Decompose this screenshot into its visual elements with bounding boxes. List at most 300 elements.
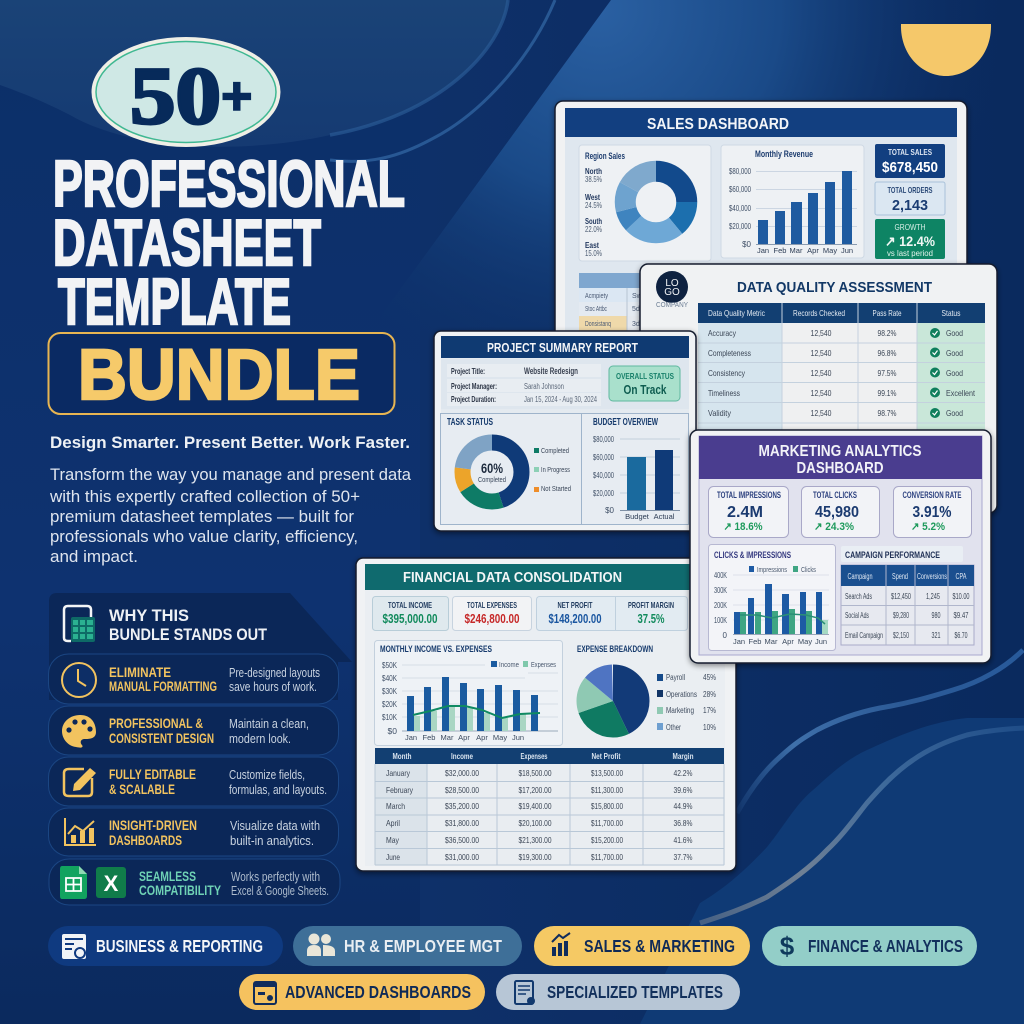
row: fully editable and scalable: FULLY EDITABLE xyxy=(109,766,196,782)
table: campaign performance: $12,450 xyxy=(891,592,911,601)
pill: hr and employee mgt xyxy=(293,926,522,966)
row: eliminate manual formatting: ELIMINATE xyxy=(109,664,171,680)
table: data quality: Good xyxy=(946,328,963,338)
card: project summary report xyxy=(434,331,696,531)
table: monthly financials: $31,800.00 xyxy=(445,818,479,828)
icon: google sheets xyxy=(60,866,87,899)
pill: finance and analytics xyxy=(762,926,977,966)
stat: total orders: TOTAL ORDERS xyxy=(888,185,933,195)
table: campaign performance: 321 xyxy=(932,631,941,640)
chart: monthly income vs expenses: $30K xyxy=(382,686,397,696)
table: data quality: Good xyxy=(946,368,963,378)
table: campaign performance: Campaign xyxy=(848,572,872,581)
pill: business and reporting xyxy=(48,926,283,966)
row: eliminate manual formatting: MANUAL FORMATTING xyxy=(109,678,217,694)
icon: people xyxy=(307,934,335,956)
project info: Project Manager: xyxy=(451,381,497,391)
table: data quality: 98.2% xyxy=(878,328,897,338)
chart: clicks and impressions xyxy=(708,544,836,650)
table: data quality: 12,540 xyxy=(810,388,832,398)
table: data quality: Status xyxy=(942,308,960,318)
stat: conversion rate: 3.91% xyxy=(912,504,952,521)
pill: advanced dashboards xyxy=(239,974,485,1010)
panel: task status xyxy=(440,414,582,524)
row: fully editable and scalable: formulas, and layouts. xyxy=(229,782,327,797)
description paragraph xyxy=(49,465,412,566)
description paragraph: and impact. xyxy=(50,547,138,566)
panel: budget overview xyxy=(582,414,688,524)
table: campaign performance xyxy=(841,565,974,645)
icon: clock xyxy=(62,663,96,697)
table: monthly financials: Income xyxy=(451,752,473,761)
table: monthly financials: April xyxy=(386,818,400,828)
project info: Website Redesign xyxy=(524,366,578,376)
table: data quality: 99.1% xyxy=(878,388,897,398)
table: campaign performance: $6.70 xyxy=(954,631,968,640)
bundle banner: BUNDLE xyxy=(78,336,360,415)
row: insight-driven dashboards: built-in analytics. xyxy=(230,833,314,848)
chart: clicks and impressions: Clicks xyxy=(801,565,816,574)
chart: monthly income vs expenses: Jan xyxy=(405,733,417,742)
table: monthly financials: 39.6% xyxy=(674,785,693,795)
table: data quality: 12,540 xyxy=(810,368,832,378)
stat: total sales: TOTAL SALES xyxy=(888,147,932,157)
chart: clicks and impressions: 300K xyxy=(714,586,727,595)
row: seamless compatibility xyxy=(49,859,340,905)
table: data quality: 97.5% xyxy=(878,368,897,378)
panel: region sales: South xyxy=(585,216,602,226)
row: insight-driven dashboards: Visualize data with xyxy=(230,818,320,833)
row: seamless compatibility: Excel & Google Sheets. xyxy=(231,883,329,898)
chart: expense breakdown: 45% xyxy=(703,673,716,682)
table: monthly financials: $36,500.00 xyxy=(445,835,479,845)
table: campaign performance: $2,150 xyxy=(893,631,909,640)
description paragraph: Transform the way you manage and present data xyxy=(50,465,412,484)
stat: total expenses xyxy=(452,596,532,630)
pill: specialized templates: SPECIALIZED TEMPLATES xyxy=(547,982,723,1002)
table: sales lower xyxy=(579,273,649,336)
panel: budget overview: $80,000 xyxy=(593,435,614,444)
table: monthly financials: Net Profit xyxy=(592,752,621,761)
panel: region sales: 22.0% xyxy=(585,225,602,234)
chart: clicks and impressions: CLICKS & IMPRESSIONS xyxy=(714,550,791,560)
table: monthly financials: $15,800.00 xyxy=(591,801,623,811)
panel: region sales: East xyxy=(585,240,599,250)
table: monthly financials: May xyxy=(386,835,400,845)
table: data quality: Timeliness xyxy=(708,388,740,398)
table: data quality: Data Quality Metric xyxy=(708,308,766,318)
stat: total clicks: ↗ 24.3% xyxy=(814,521,854,533)
stat: total clicks: 45,980 xyxy=(815,504,859,521)
panel: region sales: 15.0% xyxy=(585,249,602,258)
card: marketing analytics dashboard xyxy=(690,430,991,663)
table: campaign performance: $10.00 xyxy=(952,592,970,601)
table: data quality: 12,540 xyxy=(810,348,832,358)
table: campaign performance: Search Ads xyxy=(845,592,872,601)
icon: chart xyxy=(65,818,96,845)
chart: expense breakdown: Other xyxy=(666,723,681,732)
row: seamless compatibility: COMPATIBILITY xyxy=(139,882,222,898)
pill: finance and analytics: FINANCE & ANALYTICS xyxy=(808,936,963,956)
table: data quality: Good xyxy=(946,348,963,358)
chart: expense breakdown: 17% xyxy=(703,706,716,715)
table: data quality: Completeness xyxy=(708,348,751,358)
table: campaign performance: $9.47 xyxy=(954,611,969,620)
chart: monthly income vs expenses: $50K xyxy=(382,660,397,670)
panel: monthly revenue: $60,000 xyxy=(729,185,751,194)
badge: 50+ xyxy=(92,37,280,147)
chart: expense breakdown: 10% xyxy=(703,723,716,732)
row: fully editable and scalable: & SCALABLE xyxy=(109,781,175,797)
stat: total sales: $678,450 xyxy=(882,159,938,176)
panel: monthly revenue xyxy=(721,145,864,258)
table: campaign performance: Email Campaign xyxy=(845,631,883,640)
table: data quality: 98.7% xyxy=(878,408,897,418)
panel: monthly revenue: Apr xyxy=(807,246,819,255)
table: monthly financials: $11,300.00 xyxy=(591,785,623,795)
chart: monthly income vs expenses: Feb xyxy=(423,733,435,742)
stat: total sales xyxy=(875,144,945,178)
chart: clicks and impressions: Jan xyxy=(733,637,745,646)
project info: Project Title: xyxy=(451,366,485,376)
table: data quality: Validity xyxy=(708,408,732,418)
logo: LO xyxy=(665,278,679,289)
title: PROFESSIONAL xyxy=(53,147,405,220)
stat: total income xyxy=(372,596,448,630)
table: monthly financials: June xyxy=(386,852,400,862)
panel: budget overview: Budget xyxy=(625,512,650,521)
chart: expense breakdown: EXPENSE BREAKDOWN xyxy=(577,644,653,655)
chart: clicks and impressions: Feb xyxy=(749,637,761,646)
chart: monthly income vs expenses: $20K xyxy=(382,699,397,709)
panel: why this bundle stands out xyxy=(49,593,352,700)
table: sales lower: Stoc Attbc xyxy=(585,306,607,313)
heading: campaign performance: CAMPAIGN PERFORMANCE xyxy=(845,550,940,561)
status: on track: On Track xyxy=(624,382,667,397)
stat: total expenses: TOTAL EXPENSES xyxy=(467,600,517,610)
panel: task status: 60% xyxy=(481,460,503,476)
table: sales lower: 3d xyxy=(632,321,640,328)
icon: dashboard window xyxy=(254,982,276,1004)
table: monthly financials: 41.6% xyxy=(674,835,693,845)
table: monthly financials: February xyxy=(386,785,414,795)
row: seamless compatibility: SEAMLESS xyxy=(139,868,196,884)
pill: hr and employee mgt: HR & EMPLOYEE MGT xyxy=(344,936,502,956)
donut chart: task status xyxy=(462,442,522,502)
chart: clicks and impressions: May xyxy=(798,637,812,646)
row: fully editable and scalable xyxy=(48,757,338,806)
chart: monthly income vs expenses: MONTHLY INCOME VS. EXPENSES xyxy=(380,644,492,655)
chart: monthly income vs expenses: $0 xyxy=(388,726,397,736)
row: seamless compatibility: Works perfectly with xyxy=(231,869,320,884)
table: monthly financials: 44.9% xyxy=(674,801,693,811)
panel: task status: TASK STATUS xyxy=(447,417,493,428)
stat: growth: GROWTH xyxy=(894,222,926,232)
stat: net profit and margin: 37.5% xyxy=(638,611,665,626)
table: monthly financials: Margin xyxy=(672,752,694,761)
table: data quality xyxy=(698,303,985,430)
icon: spreadsheet xyxy=(64,606,95,642)
chart: monthly income vs expenses: $40K xyxy=(382,673,397,683)
table: data quality: Consistency xyxy=(708,368,746,378)
table: campaign performance: Social Ads xyxy=(845,611,869,620)
heading: data quality assessment: DATA QUALITY ASSESSMENT xyxy=(737,279,932,296)
chart: monthly income vs expenses: Income xyxy=(499,660,519,669)
table: data quality: Good xyxy=(946,408,963,418)
table: campaign performance: Spend xyxy=(892,572,908,581)
chart: monthly income vs expenses: $10K xyxy=(382,712,397,722)
project info: Project Duration: xyxy=(451,394,496,404)
chart: clicks and impressions: 0 xyxy=(723,631,728,640)
row: professional and consistent design: PROFESSIONAL & xyxy=(109,715,203,731)
panel: region sales: 38.5% xyxy=(585,175,602,184)
table: monthly financials: $28,500.00 xyxy=(445,785,479,795)
table: monthly financials: 36.8% xyxy=(674,818,693,828)
header: project summary xyxy=(441,336,689,358)
chart: clicks and impressions: 200K xyxy=(714,601,727,610)
table: monthly financials: $13,500.00 xyxy=(591,768,623,778)
project info: Jan 15, 2024 - Aug 30, 2024 xyxy=(524,395,597,404)
table: campaign performance: 980 xyxy=(932,611,941,620)
card: sales dashboard xyxy=(555,101,967,351)
table: campaign performance: CPA xyxy=(956,572,967,581)
panel: budget overview: $20,000 xyxy=(593,489,614,498)
chart: clicks and impressions: Jun xyxy=(815,637,827,646)
logo: GO xyxy=(664,287,680,298)
chart: expense breakdown: Payroll xyxy=(666,673,685,682)
icon: dollar: $ xyxy=(780,931,795,961)
panel: region sales xyxy=(579,145,711,261)
table: sales lower: Sw xyxy=(632,293,643,300)
table: monthly financials: $20,100.00 xyxy=(518,818,552,828)
table: monthly financials: $11,700.00 xyxy=(591,818,623,828)
pill: sales and marketing xyxy=(534,926,750,966)
description paragraph: premium datasheet templates — built for xyxy=(50,507,354,526)
stat: net profit and margin: NET PROFIT xyxy=(558,600,593,610)
panel: region sales: North xyxy=(585,166,602,176)
table: sales lower: 5d xyxy=(632,306,640,313)
panel: budget overview: Actual xyxy=(654,512,675,521)
stat: growth xyxy=(875,219,945,259)
chart: clicks and impressions: 400K xyxy=(714,571,727,580)
table: sales lower: Acmpiety xyxy=(585,293,608,300)
panel: monthly revenue: Feb xyxy=(774,246,786,255)
table: data quality: Accuracy xyxy=(708,328,737,338)
chart: clicks and impressions: Apr xyxy=(782,637,794,646)
stat: total orders: 2,143 xyxy=(892,197,928,214)
table: campaign performance: $9,280 xyxy=(893,611,909,620)
table: campaign performance: 1,245 xyxy=(926,592,940,601)
status: on track: OVERALL STATUS xyxy=(616,371,674,381)
panel: monthly revenue: Jan xyxy=(757,246,769,255)
icon: report xyxy=(62,934,86,959)
table: monthly financials: $11,700.00 xyxy=(591,852,623,862)
panel: monthly revenue: $40,000 xyxy=(729,204,751,213)
pill: advanced dashboards: ADVANCED DASHBOARDS xyxy=(285,982,471,1002)
table: data quality: Pass Rate xyxy=(872,308,902,318)
stat: total clicks: TOTAL CLICKS xyxy=(813,490,857,500)
heading: why this bundle xyxy=(109,606,268,644)
panel: region sales: West xyxy=(585,192,600,202)
panel: task status: Not Started xyxy=(541,484,571,493)
panel: monthly revenue: Monthly Revenue xyxy=(755,149,813,160)
badge: 50+: 50 xyxy=(130,50,221,141)
icon: gold half circle xyxy=(901,24,991,76)
heading: why this bundle: BUNDLE STANDS OUT xyxy=(109,625,268,644)
header: sales dashboard xyxy=(565,108,957,137)
table: data quality: 96.8% xyxy=(878,348,897,358)
chart: clicks and impressions: 100K xyxy=(714,616,727,625)
stat: total impressions xyxy=(708,486,788,538)
card: financial data consolidation xyxy=(356,558,736,871)
project info: Sarah Johnson xyxy=(524,382,564,391)
row: eliminate manual formatting: save hours of work. xyxy=(229,679,317,694)
badge: 50+: + xyxy=(221,66,253,126)
chart: expense breakdown: Operations xyxy=(666,690,697,699)
icon: excel xyxy=(96,867,126,898)
logo xyxy=(656,271,688,309)
heading: campaign performance xyxy=(841,546,963,562)
panel: budget overview: $40,000 xyxy=(593,471,614,480)
title: DATASHEET xyxy=(53,206,321,279)
header: marketing: DASHBOARD xyxy=(796,460,884,477)
table: monthly financials: 42.2% xyxy=(674,768,693,778)
card: data quality assessment xyxy=(640,264,997,513)
table: monthly financials: $21,300.00 xyxy=(518,835,552,845)
table: monthly financials: $18,500.00 xyxy=(518,768,552,778)
table: monthly financials: March xyxy=(386,801,405,811)
chart: expense breakdown: Marketing xyxy=(666,706,694,715)
chart: clicks and impressions: Mar xyxy=(765,637,778,646)
status check icons xyxy=(930,328,940,418)
row: fully editable and scalable: Customize fields, xyxy=(229,767,305,782)
panel: monthly revenue: $80,000 xyxy=(729,167,751,176)
stat: total income: $395,000.00 xyxy=(382,611,438,626)
tagline: Design Smarter. Present Better. Work Faster. xyxy=(50,433,410,452)
stat: net profit and margin: $148,200.00 xyxy=(548,611,602,626)
table: monthly financials: January xyxy=(386,768,411,778)
table: monthly financials: $15,200.00 xyxy=(591,835,623,845)
icon: palette xyxy=(62,715,96,748)
stat: conversion rate xyxy=(894,486,972,538)
table: data quality: Excellent xyxy=(946,388,976,398)
panel: region sales: 24.5% xyxy=(585,201,602,210)
chart: monthly income vs expenses: Mar xyxy=(441,733,454,742)
description paragraph: professionals who value clarity, efficiency, xyxy=(50,527,358,546)
table: sales lower: Donsistanq xyxy=(585,321,611,328)
table: monthly financials: $19,300.00 xyxy=(518,852,552,862)
panel: monthly revenue: Mar xyxy=(790,246,803,255)
row: professional and consistent design xyxy=(48,706,338,755)
row: insight-driven dashboards: INSIGHT-DRIVEN xyxy=(109,817,197,833)
icon: document xyxy=(515,981,535,1005)
stat: growth: ↗ 12.4% xyxy=(885,233,935,249)
table: campaign performance: Conversions xyxy=(917,572,947,581)
icon: growth chart xyxy=(552,933,570,956)
header: marketing xyxy=(699,436,982,479)
row: professional and consistent design: CONSISTENT DESIGN xyxy=(109,730,214,746)
panel: monthly revenue: May xyxy=(823,246,837,255)
row: insight-driven dashboards: DASHBOARDS xyxy=(109,832,182,848)
stat: conversion rate: CONVERSION RATE xyxy=(902,490,962,500)
panel: monthly revenue: $20,000 xyxy=(729,222,751,231)
header: marketing: MARKETING ANALYTICS xyxy=(758,443,922,460)
stat: conversion rate: ↗ 5.2% xyxy=(911,521,945,533)
logo: COMPANY xyxy=(656,300,688,309)
panel: budget overview: $0 xyxy=(605,506,615,515)
panel: budget overview: $60,000 xyxy=(593,453,614,462)
stat: total impressions: ↗ 18.6% xyxy=(724,521,763,533)
panel: monthly revenue: $0 xyxy=(742,240,752,249)
table: monthly financials: $19,400.00 xyxy=(518,801,552,811)
pill: business and reporting: BUSINESS & REPORTING xyxy=(96,936,263,956)
stat: net profit and margin: PROFIT MARGIN xyxy=(628,600,674,610)
pill: specialized templates xyxy=(496,974,740,1010)
chart: expense breakdown: 28% xyxy=(703,690,716,699)
chart: monthly income vs expenses: May xyxy=(493,733,507,742)
table: data quality: 12,540 xyxy=(810,408,832,418)
row: eliminate manual formatting: Pre-designed layouts xyxy=(229,665,320,680)
chart: monthly income vs expenses: Apr xyxy=(476,733,488,742)
table: monthly financials: 37.7% xyxy=(674,852,693,862)
icon: edit xyxy=(64,768,96,796)
table: monthly financials: $32,000.00 xyxy=(445,768,479,778)
panel: budget overview: BUDGET OVERVIEW xyxy=(593,417,658,428)
table: data quality: Records Checked xyxy=(793,308,845,318)
header: financial xyxy=(365,564,725,590)
row: eliminate manual formatting xyxy=(48,654,338,704)
stat: total income: TOTAL INCOME xyxy=(388,600,432,610)
panel: region sales: Region Sales xyxy=(585,151,625,161)
panel: task status: Completed xyxy=(478,475,506,484)
status: on track xyxy=(609,366,680,401)
chart: monthly income vs expenses: Apr xyxy=(458,733,470,742)
pill: sales and marketing: SALES & MARKETING xyxy=(584,936,735,956)
panel: monthly revenue: Jun xyxy=(841,246,853,255)
stat: total impressions: TOTAL IMPRESSIONS xyxy=(717,490,781,500)
stat: total clicks xyxy=(802,486,880,538)
header: financial: FINANCIAL DATA CONSOLIDATION xyxy=(403,570,622,586)
table: monthly financials: $31,000.00 xyxy=(445,852,479,862)
panel: task status: Completed xyxy=(541,446,569,455)
chart: monthly income vs expenses: Jun xyxy=(512,733,524,742)
chart: clicks and impressions: Impressions xyxy=(757,565,787,574)
table: monthly financials: Month xyxy=(392,752,412,761)
description paragraph: with this expertly crafted collection of 50+ xyxy=(49,487,360,506)
row: professional and consistent design: modern look. xyxy=(229,731,291,746)
stat: total impressions: 2.4M xyxy=(727,504,763,521)
header: sales dashboard: SALES DASHBOARD xyxy=(647,116,789,133)
title: TEMPLATE xyxy=(58,265,291,338)
project info xyxy=(441,359,689,409)
stat: growth: vs last period xyxy=(887,249,933,258)
donut chart: region xyxy=(625,171,687,233)
row: professional and consistent design: Maintain a clean, xyxy=(229,716,309,731)
chart: monthly income vs expenses: Expenses xyxy=(531,660,556,669)
stat: total orders xyxy=(875,182,945,215)
title xyxy=(53,147,405,338)
heading: why this bundle: WHY THIS xyxy=(109,606,189,625)
table: monthly financials: Expenses xyxy=(520,752,548,761)
chart: expense breakdown xyxy=(577,644,716,732)
table: monthly financials: $35,200.00 xyxy=(445,801,479,811)
table: data quality: 12,540 xyxy=(810,328,832,338)
table: monthly financials: $17,200.00 xyxy=(518,785,552,795)
panel: task status: In Progress xyxy=(541,465,570,474)
table: monthly financials xyxy=(375,748,724,865)
header: project summary: PROJECT SUMMARY REPORT xyxy=(487,341,638,355)
stat: net profit and margin xyxy=(536,596,688,630)
